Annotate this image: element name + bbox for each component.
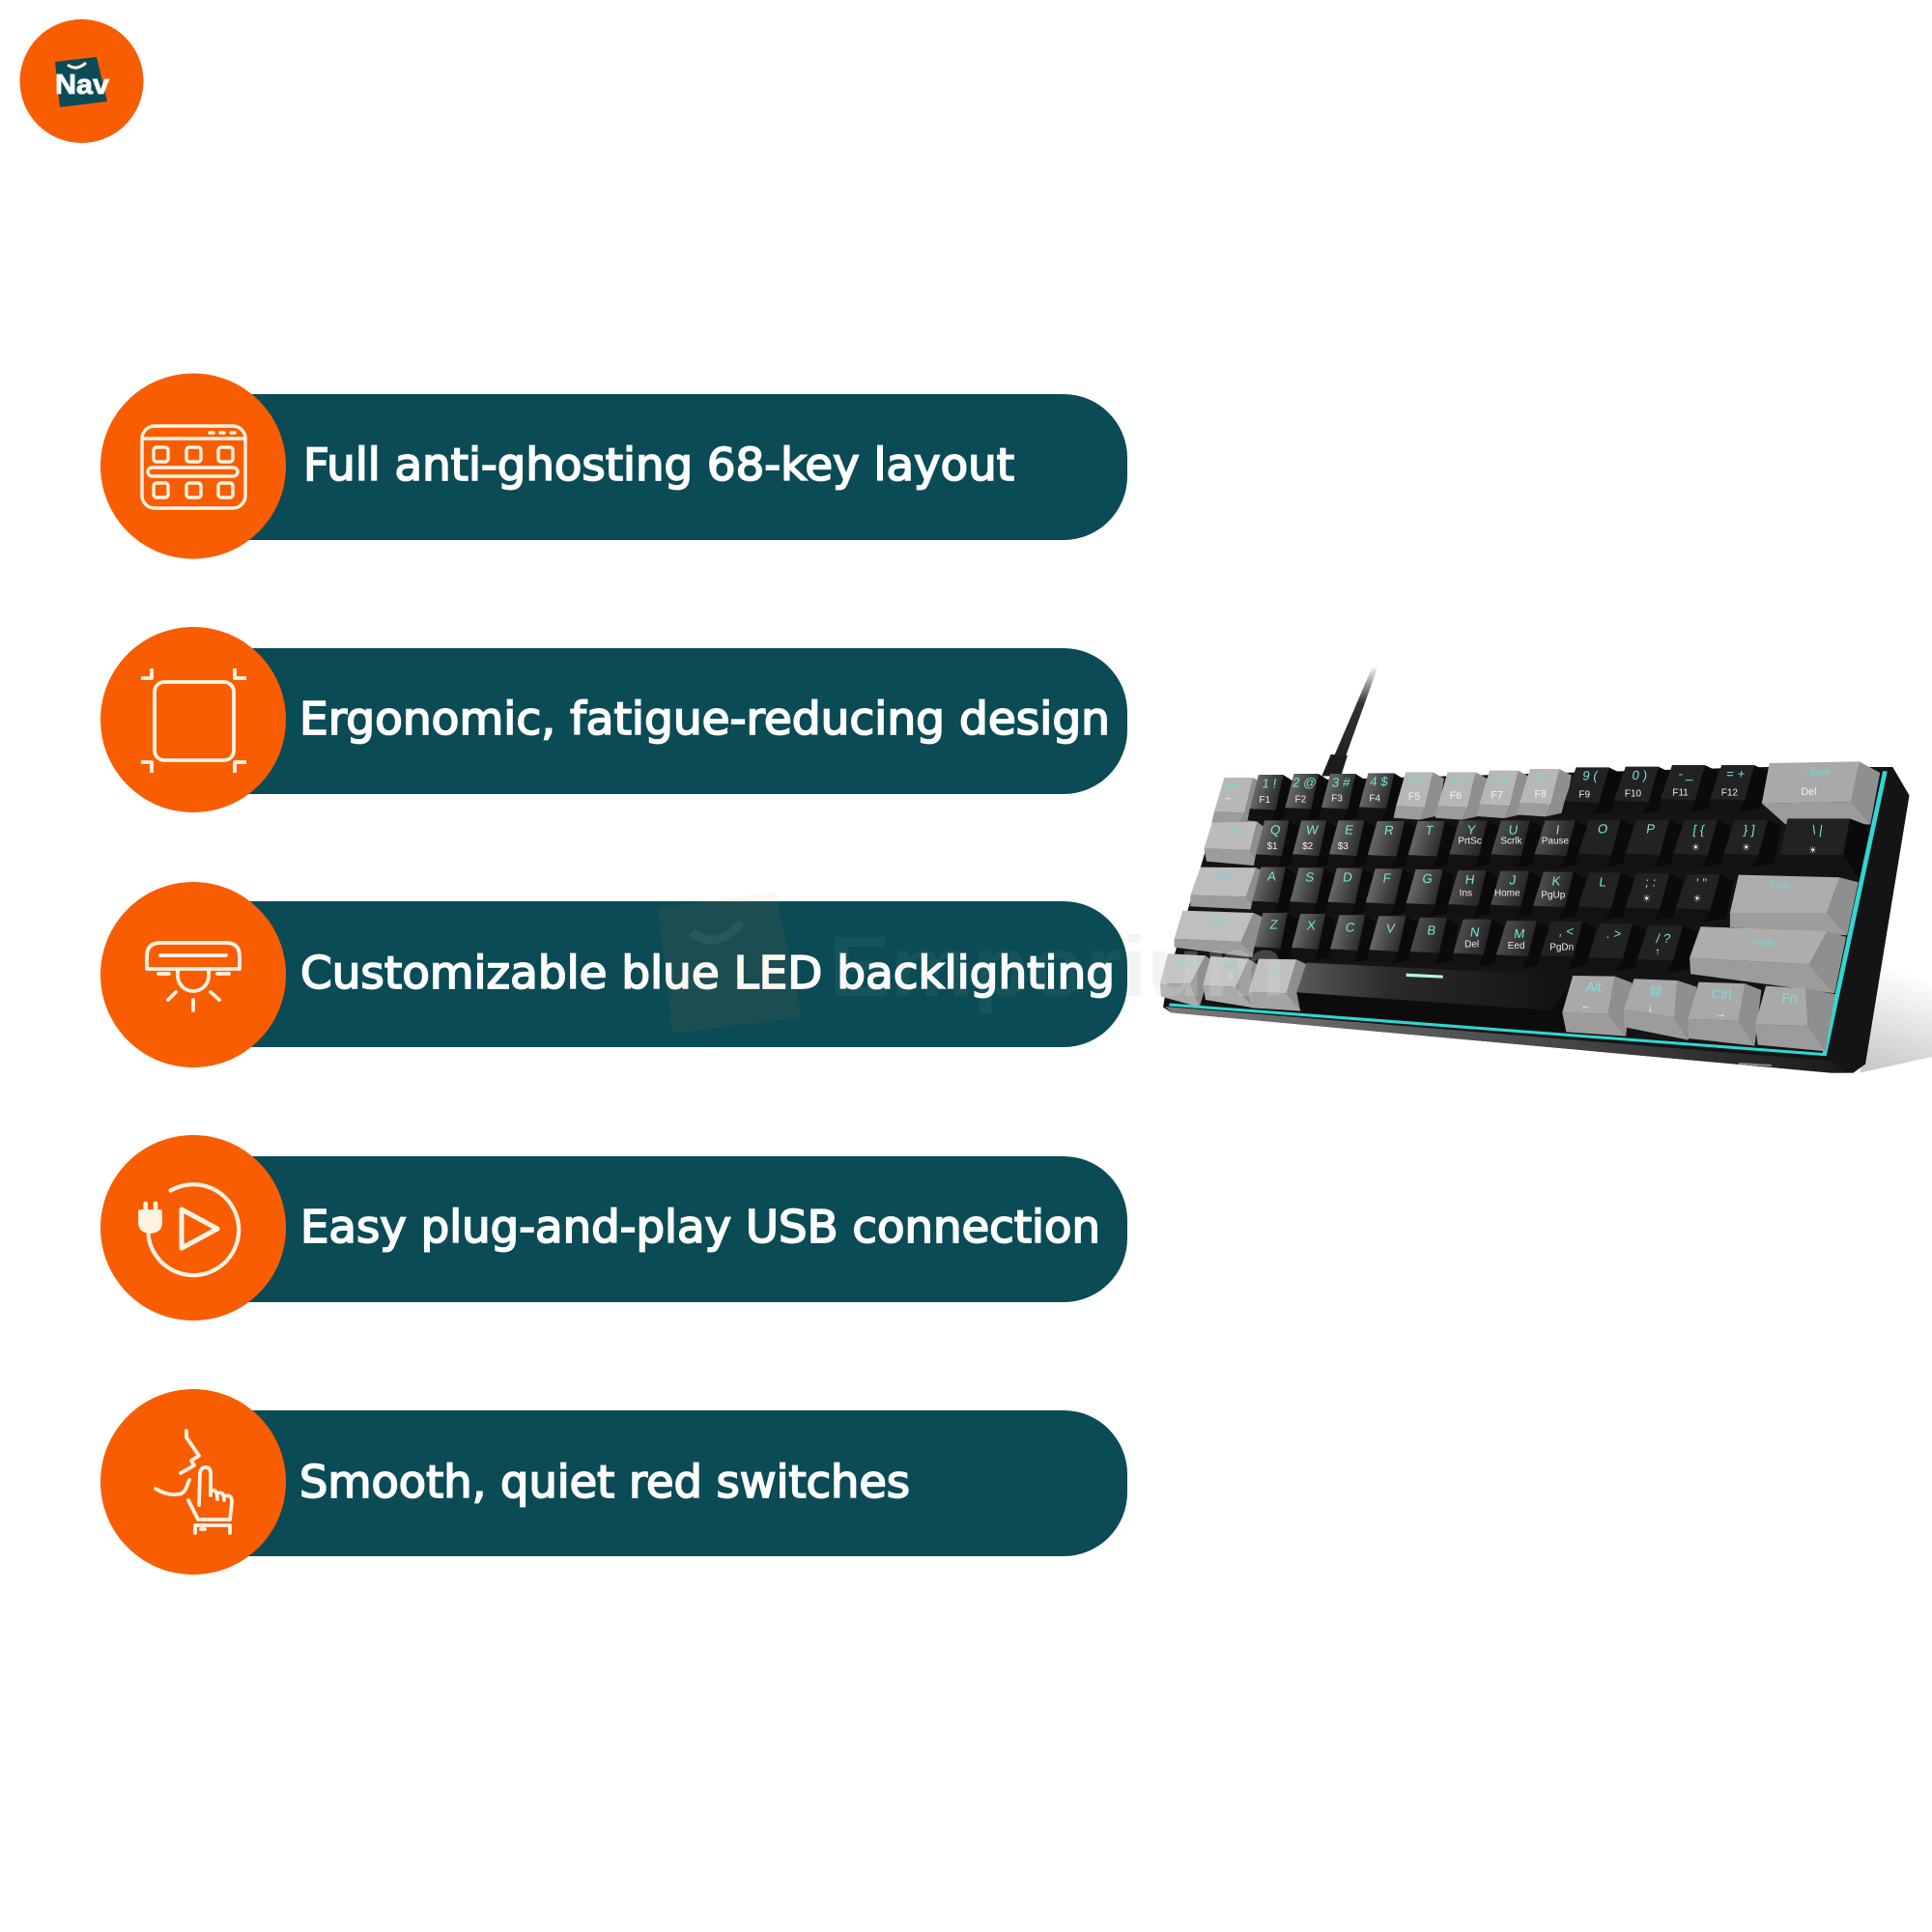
home row keys: S (1304, 869, 1315, 884)
qwerty row keys: U (1508, 822, 1519, 837)
qwerty row keys: $1 (1266, 841, 1278, 852)
feature 4: USB plug and play (100, 1135, 1127, 1321)
shift row keys: , < (1558, 923, 1575, 938)
number row keys: - _ (1678, 766, 1695, 781)
number row keys: 4 $ (1369, 775, 1389, 789)
home row keys: F (1382, 870, 1392, 885)
number row keys: F9 (1578, 789, 1591, 800)
usb cable (1321, 668, 1378, 776)
qwerty row keys: $2 (1302, 841, 1314, 852)
home row keys: L (1598, 874, 1607, 889)
logo badge: Nav (55, 70, 109, 100)
home row keys: ☀ (1692, 894, 1701, 904)
number row keys (1211, 761, 1880, 825)
space row keys: ▤ (1649, 982, 1662, 997)
number row keys: F1 (1259, 795, 1270, 806)
space row keys: Win (1222, 960, 1237, 970)
label: feature 5 text: Smooth, quiet red switches (299, 1456, 910, 1508)
number row keys: F5 (1408, 791, 1420, 803)
home row keys: K (1551, 874, 1562, 889)
shift row keys: / ? (1655, 931, 1671, 946)
shift row keys (1175, 911, 1846, 993)
qwerty row keys: R (1383, 823, 1395, 838)
shift row keys: B (1426, 923, 1436, 938)
number row keys: F11 (1672, 788, 1689, 799)
number row keys: 2 @ (1292, 775, 1318, 789)
qwerty row keys: } ] (1743, 822, 1756, 837)
shift row keys: Shift (1209, 918, 1228, 927)
number row keys: F12 (1721, 787, 1738, 798)
qwerty row keys: T (1425, 823, 1435, 838)
qwerty row keys (1204, 818, 1869, 879)
qwerty row keys: O (1597, 822, 1608, 837)
space row keys: ← (1580, 1000, 1591, 1011)
icon: keyboard layout window (142, 426, 245, 508)
home row keys: D (1342, 870, 1353, 885)
qwerty row keys: ☀ (1742, 843, 1750, 854)
shift row keys: Z (1269, 918, 1279, 932)
space row keys: ↓ (1648, 1003, 1653, 1014)
home row keys: J (1509, 873, 1517, 888)
label: feature 3 text: Customizable blue LED backlighting (300, 947, 1115, 999)
qwerty row keys: P (1645, 822, 1656, 837)
infographic canvas (19, 19, 1932, 1575)
home row keys: H (1464, 872, 1475, 887)
home row keys: ☀ (1642, 894, 1651, 904)
space row keys: Alt (1585, 980, 1603, 994)
shift row keys: M (1513, 926, 1525, 941)
home row keys: Home (1494, 889, 1520, 899)
label: feature 2 text: Ergonomic, fatigue-reducing design (299, 693, 1110, 745)
icon: plug and play button (140, 1184, 239, 1275)
space row keys: Fn (1781, 991, 1798, 1006)
watermark: Emporium (829, 919, 1286, 1014)
qwerty row keys: Y (1466, 822, 1477, 837)
feature 2: ergonomic design (100, 627, 1127, 812)
home row keys (1190, 867, 1859, 935)
label: feature 1 text: Full anti-ghosting 68-key layout (303, 439, 1014, 491)
icon: LED lamp (147, 943, 240, 1010)
qwerty row keys: I (1555, 822, 1561, 837)
home row keys: ' " (1695, 876, 1708, 891)
number row keys: ← Back (1799, 768, 1831, 778)
number row keys: 3 # (1331, 775, 1351, 789)
keyboard frame (1163, 767, 1910, 1073)
label: feature 4 text: Easy plug-and-play USB connection (300, 1201, 1100, 1253)
qwerty row keys: ☀ (1691, 843, 1700, 854)
home row keys: Caps (1212, 870, 1235, 880)
qwerty row keys: [ { (1692, 822, 1706, 837)
qwerty row keys: $3 (1338, 841, 1349, 852)
shift row keys: ⇧Shift (1748, 938, 1775, 948)
number row keys: F7 (1492, 789, 1503, 801)
qwerty row keys: Q (1269, 822, 1281, 837)
number row keys: 1 ! (1262, 776, 1277, 790)
space row keys (1160, 953, 1835, 1051)
number row keys: 6 ^ (1453, 777, 1465, 786)
number row keys: Esc (1225, 780, 1240, 789)
front edge port marking (1739, 1063, 1772, 1066)
number row keys: 5 % (1409, 777, 1425, 786)
qwerty row keys: \ | (1811, 822, 1824, 837)
icon: square with corner marks (141, 668, 246, 773)
home row keys: G (1421, 871, 1434, 886)
shift row keys: N (1469, 924, 1481, 939)
shift row keys: ↑ (1656, 947, 1661, 957)
shift row keys: Del (1464, 939, 1479, 950)
shift row keys: . > (1605, 926, 1622, 941)
qwerty row keys: PrtSc (1458, 837, 1482, 847)
number row keys: F4 (1369, 793, 1380, 804)
number row keys: 7 & (1494, 775, 1509, 784)
number row keys: F2 (1294, 794, 1307, 805)
icon: hush finger on lips (156, 1431, 232, 1533)
number row keys: F8 (1535, 789, 1547, 801)
home row keys: ; : (1644, 875, 1657, 890)
number row keys: 9 ( (1581, 769, 1599, 783)
number row keys: Del (1801, 786, 1816, 798)
qwerty row keys: W (1305, 822, 1320, 837)
qwerty row keys: Pause (1542, 837, 1570, 847)
shift row keys: C (1345, 920, 1356, 934)
number row keys: 0 ) (1632, 768, 1648, 782)
space row keys: ⌂ (1227, 969, 1233, 980)
qwerty row keys: ☀ (1808, 845, 1817, 856)
space row keys: → (1716, 1009, 1726, 1020)
number row keys: F6 (1450, 790, 1462, 802)
number row keys: F3 (1331, 794, 1343, 805)
space bar (1296, 963, 1575, 1032)
space row keys: Alt (1270, 966, 1281, 976)
space row keys: Ctrl (1179, 958, 1192, 968)
space row keys: Ctrl (1711, 987, 1732, 1002)
home row keys: Enter ← (1770, 880, 1804, 890)
home row keys: A (1266, 869, 1277, 884)
number row keys: = + (1725, 766, 1747, 781)
logo badge (19, 19, 143, 143)
number row keys: ~ (1225, 794, 1232, 806)
qwerty row keys: Scrlk (1500, 837, 1522, 847)
shift row keys: V (1385, 922, 1396, 936)
watermark: Emporium (829, 919, 1286, 1014)
drop shadow (1860, 937, 1932, 1073)
keyboard product image (1160, 668, 1932, 1073)
shift row keys: Eed (1508, 941, 1525, 952)
home row keys: Ins (1460, 889, 1472, 899)
shift row keys: PgDn (1549, 943, 1574, 953)
watermark (658, 892, 1286, 1034)
feature 5: quiet red switches (100, 1389, 1127, 1575)
feature 3: LED backlighting (100, 882, 1127, 1067)
home row keys: PgUp (1541, 890, 1566, 900)
number row keys: 8 * (1536, 774, 1548, 783)
qwerty row keys: Tab (1225, 826, 1239, 836)
qwerty row keys: E (1344, 822, 1354, 837)
feature 1: anti-ghosting layout (100, 373, 1127, 558)
shift row keys: X (1306, 918, 1317, 932)
number row keys: F10 (1625, 789, 1641, 800)
